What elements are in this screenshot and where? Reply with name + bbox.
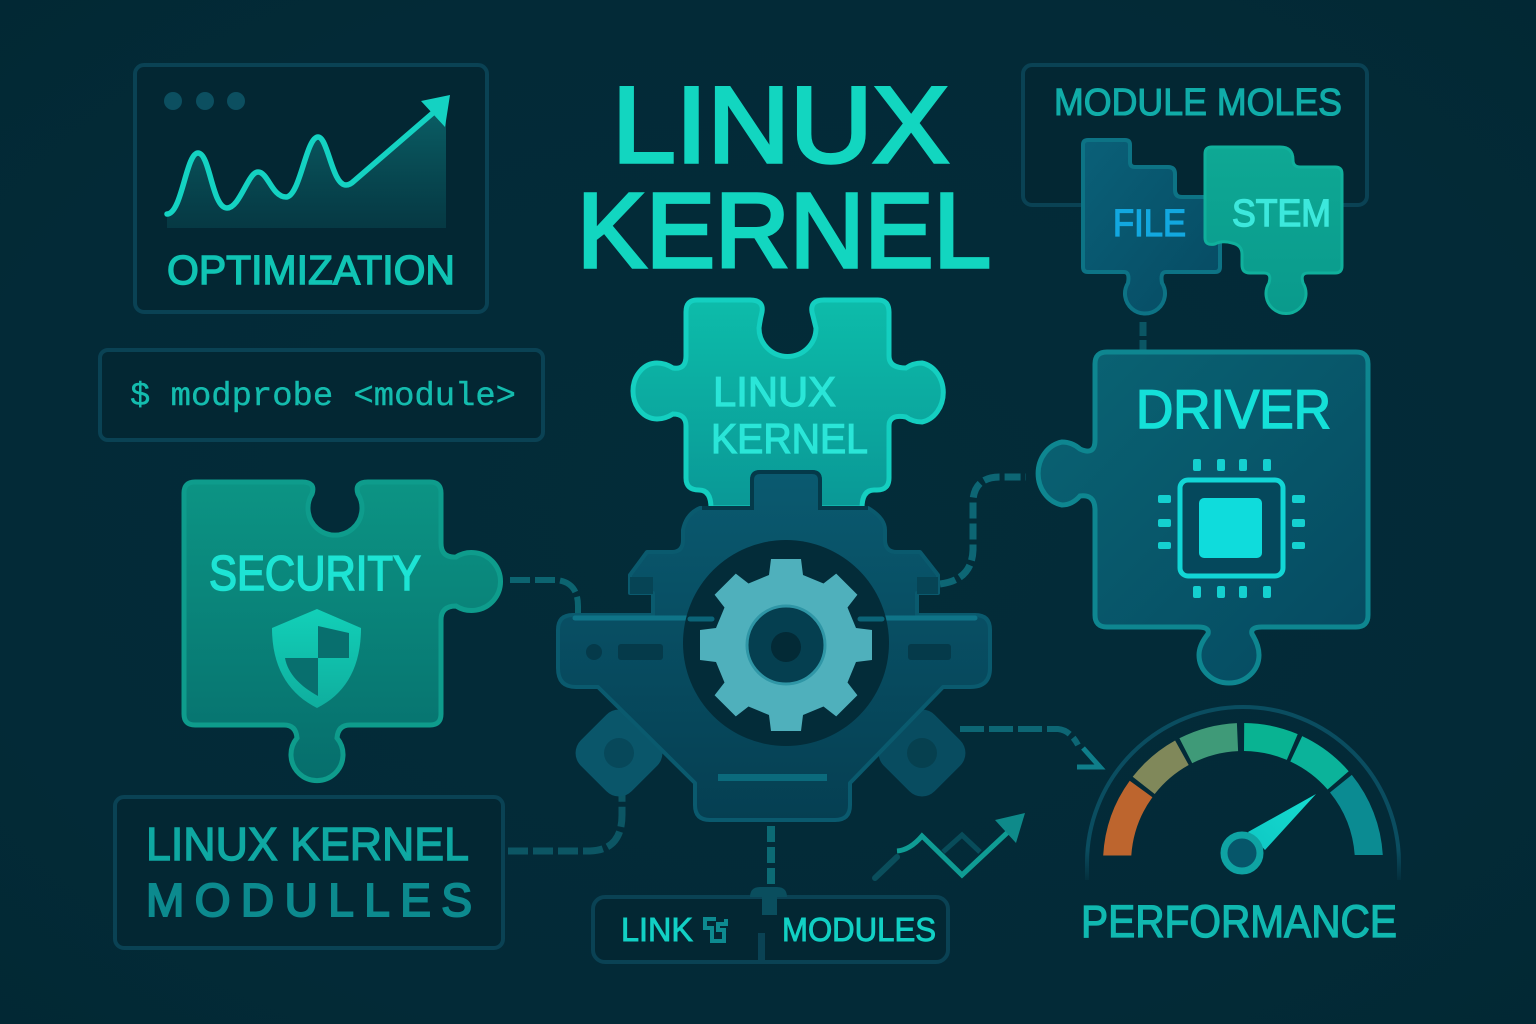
puzzle piece: driver <box>1038 352 1368 683</box>
puzzle piece: security <box>184 482 501 781</box>
connector: gear to performance <box>960 729 1100 767</box>
shoulder steps <box>630 577 938 594</box>
connector cap <box>750 887 787 915</box>
gauge: performance <box>1081 707 1399 947</box>
icon: chip <box>1158 459 1305 598</box>
label: security: SECURITY <box>209 547 421 601</box>
puzzle piece: linux kernel <box>633 300 943 508</box>
puzzle piece: stem <box>1205 147 1342 314</box>
gauge segments <box>1103 723 1383 856</box>
top tab outline <box>702 472 868 508</box>
panel: linux kernel modules: LINUX KERNEL <box>146 818 469 870</box>
wing slots <box>586 644 951 660</box>
mounting foot: left <box>568 702 670 804</box>
icon: gear <box>700 559 872 731</box>
connector: security to gear <box>510 580 578 618</box>
wing highlights <box>575 616 975 620</box>
panel: linux kernel modules: MODULLES <box>146 874 472 926</box>
puzzle piece: linux kernel: KERNEL <box>711 415 868 462</box>
housing body <box>558 472 990 820</box>
icon: link glyph <box>705 919 726 941</box>
label: link: LINK <box>621 911 693 948</box>
command box: modprobe: $ modprobe <module> <box>130 378 516 415</box>
puzzle piece: file <box>1083 140 1220 314</box>
panel: link modules <box>593 887 948 962</box>
label: driver: DRIVER <box>1136 378 1331 440</box>
label: optimization: OPTIMIZATION <box>167 247 455 293</box>
command box: modprobe <box>100 350 543 440</box>
mounting foot: right <box>871 702 973 804</box>
title <box>577 64 991 290</box>
gear recess <box>683 540 889 746</box>
connector: gear to link box <box>767 826 775 884</box>
area chart with arrow <box>167 95 450 228</box>
window dots <box>164 92 245 110</box>
label: modules: MODULES <box>782 911 936 948</box>
wing highlight over recess <box>690 616 882 622</box>
connector: file to driver <box>1140 322 1146 352</box>
heading: module moles: MODULE MOLES <box>1054 82 1342 124</box>
puzzle piece: linux kernel: LINUX <box>713 368 836 415</box>
title: LINUX <box>612 64 949 185</box>
label: performance: PERFORMANCE <box>1081 896 1397 947</box>
panel: module moles <box>1023 65 1367 205</box>
puzzle piece: stem: STEM <box>1232 193 1331 235</box>
gear housing <box>558 472 990 820</box>
puzzle piece: file: FILE <box>1113 203 1186 245</box>
gauge needle <box>1224 794 1316 871</box>
connector: gear to driver <box>940 477 1026 584</box>
connector: modules box to gear <box>508 790 622 851</box>
panel: optimization <box>135 65 487 312</box>
icon: shield <box>272 609 361 708</box>
gauge outer arc <box>1087 707 1399 880</box>
base bar <box>718 774 827 781</box>
title: KERNEL <box>577 172 991 290</box>
panel: linux kernel modules <box>115 797 503 948</box>
trend arrow <box>875 813 1025 878</box>
